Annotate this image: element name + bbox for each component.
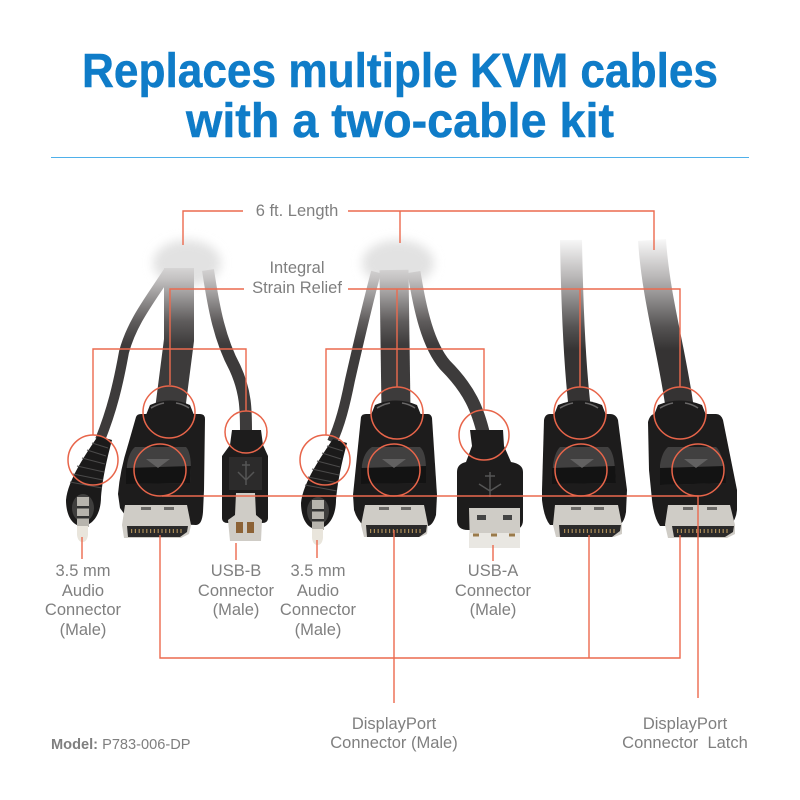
photo: 3.5 mm audio connector 1 — [66, 436, 112, 542]
label: USB-B connector: (Male) — [213, 601, 259, 619]
photo: DisplayPort connector 1 — [118, 400, 205, 538]
cables: second breakout group — [332, 240, 484, 442]
photo: DisplayPort connector 4 — [648, 400, 737, 538]
photo: USB-B connector — [222, 430, 268, 541]
label: DisplayPort connector latch: Connector Latch — [622, 734, 748, 752]
cables: single DisplayPort cables — [571, 240, 680, 410]
label: 3.5 mm audio connector 2: Connector — [280, 601, 357, 619]
label: 3.5 mm audio connector 2 — [280, 562, 357, 639]
label: USB-B connector — [198, 562, 275, 619]
photo: 3.5 mm audio connector 2 — [301, 439, 347, 545]
model number: Model: P783-006-DP — [51, 737, 191, 753]
photo: USB-A connector — [457, 430, 523, 548]
label: DisplayPort connector latch: DisplayPort — [643, 715, 728, 733]
label: USB-A connector — [455, 562, 532, 619]
title — [82, 45, 718, 148]
label: 3.5 mm audio connector 2: 3.5 mm — [290, 562, 346, 580]
label: 3.5 mm audio connector 1: 3.5 mm — [55, 562, 111, 580]
label: DisplayPort connector — [330, 715, 458, 752]
label: 6 ft. Length: 6 ft. Length — [256, 202, 338, 220]
cables: first breakout group — [100, 240, 246, 440]
callout lines: audio and USB brackets — [93, 349, 484, 435]
label: USB-B connector: USB-B — [211, 562, 261, 580]
label: USB-A connector: Connector — [455, 582, 532, 600]
label: Integral Strain Relief — [252, 259, 342, 297]
callout lines: integral strain relief — [170, 289, 680, 387]
label: 3.5 mm audio connector 2: Audio — [297, 582, 339, 600]
label: DisplayPort connector: Connector (Male) — [330, 734, 458, 752]
label: 3.5 mm audio connector 1: Audio — [62, 582, 104, 600]
label: Integral Strain Relief: Strain Relief — [252, 279, 342, 297]
photo: DisplayPort connector 3 — [542, 400, 627, 537]
label: 3.5 mm audio connector 1: (Male) — [60, 621, 106, 639]
label: 3.5 mm audio connector 1: Connector — [45, 601, 122, 619]
label: DisplayPort connector: DisplayPort — [352, 715, 437, 733]
highlight circles — [68, 386, 724, 496]
label: USB-A connector: USB-A — [468, 562, 518, 580]
title: Replaces multiple KVM cables — [82, 45, 718, 98]
label: USB-A connector: (Male) — [470, 601, 516, 619]
label: DisplayPort connector latch — [622, 715, 748, 752]
callout lines: DisplayPort connector — [160, 530, 680, 703]
title: with a two-cable kit — [185, 95, 614, 148]
label: 3.5 mm audio connector 1 — [45, 562, 122, 639]
callout lines: DisplayPort connector latch — [162, 496, 698, 698]
label: Integral Strain Relief: Integral — [269, 259, 325, 277]
callout lines: 6 ft. length — [183, 211, 654, 250]
label: 3.5 mm audio connector 2: (Male) — [295, 621, 341, 639]
photo: DisplayPort connector 2 — [353, 400, 437, 537]
label: USB-B connector: Connector — [198, 582, 275, 600]
callout lines: connector tips — [82, 537, 493, 561]
